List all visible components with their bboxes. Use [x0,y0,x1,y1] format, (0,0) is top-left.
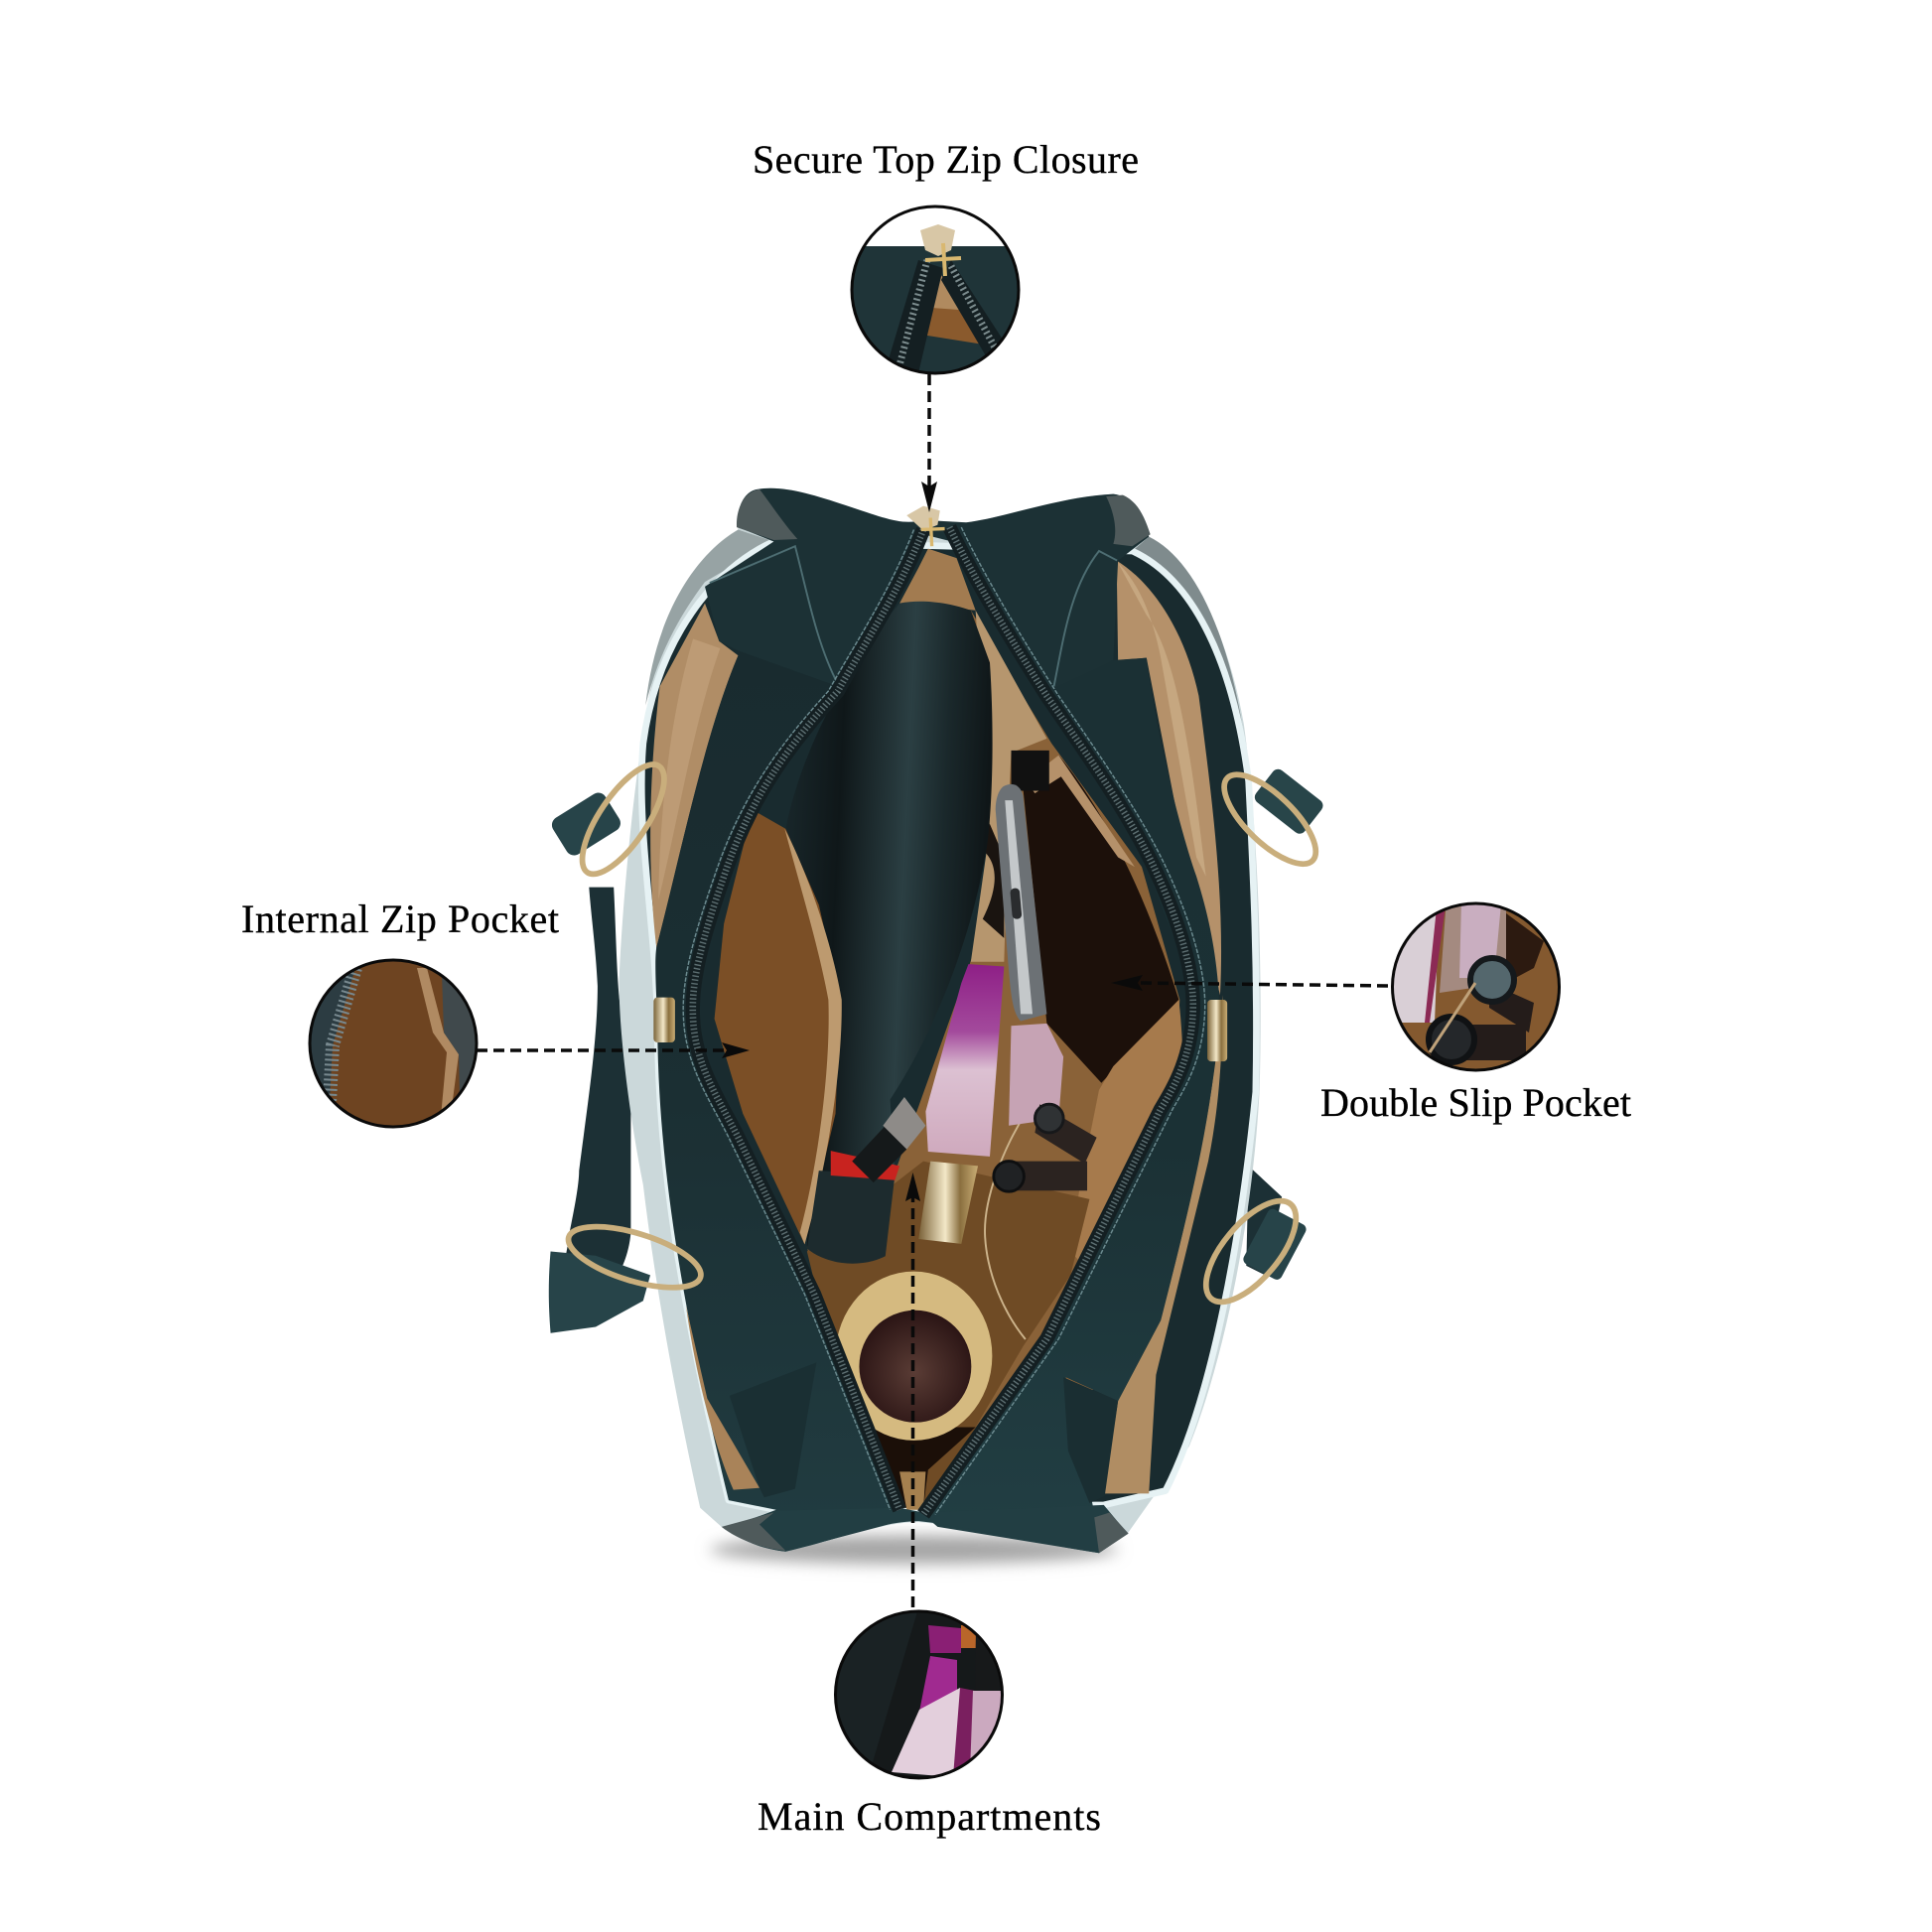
heading: secure top zip closure: Secure Top Zip Closure [753,137,1139,182]
gold ring, top right [1211,761,1329,878]
arrow: down to zip [921,374,937,512]
heading: internal zip pocket: Internal Zip Pocket [241,897,559,941]
wood ball [859,1311,971,1423]
left zip flap [655,655,899,1552]
gold lipstick tube [918,1162,978,1244]
cream compact ring [836,1272,992,1441]
lower left tan lining [686,1306,759,1490]
strap tab, top left [549,789,623,859]
tan corner patch [899,1471,925,1510]
detail circle: slip pocket [1390,898,1564,1075]
central dark leather panel [785,602,993,1256]
callout: internal zip pocket [241,897,750,1132]
lower right tan lining [1104,995,1222,1493]
bag silhouette with pale side panels [620,488,1261,1553]
smartphone [996,784,1046,1022]
detail circle: main compartments [832,1608,1006,1782]
callout: main compartments [758,1173,1101,1839]
gusset seam left [710,546,838,684]
gold ring, top left [568,753,679,886]
strap tab, top right [1252,766,1325,836]
gusset seam right [1054,551,1117,686]
top centre tan lining [899,549,976,611]
right lining highlight [1118,563,1206,877]
bag interior with white trim [641,541,1256,1510]
top rim and corner gussets [705,488,1149,691]
lipstick tube upper [1035,1104,1097,1164]
lower right corner fold [1063,1377,1118,1503]
grey upper left shoulder [645,529,773,705]
handbag photo illustration [549,488,1329,1564]
heading: double slip pocket: Double Slip Pocket [1320,1080,1631,1125]
arrow: right to pocket [477,1042,750,1058]
grey corner left [722,1513,785,1551]
callout: secure top zip closure [753,137,1139,512]
gold stud right [1207,1000,1227,1061]
dark corner patch right [1106,495,1151,546]
lipstick tube lower [994,1162,1087,1191]
callout: double slip pocket [1111,898,1631,1125]
detail circle: pocket [303,958,482,1132]
right zip flap [923,658,1219,1553]
slip pocket tan lip [1026,756,1135,867]
pale perfume bottle [1009,1024,1063,1126]
lower left corner fold [730,1362,816,1497]
pocket tan edge [784,829,842,1244]
strap tab, bottom left [549,1251,650,1333]
internal zip pocket [715,810,840,1244]
left zipper [683,529,923,1510]
upper tan fabric [971,611,1046,962]
shoulder strap [553,888,630,1299]
powder compact [836,1272,992,1441]
dark corner patch left [737,489,797,540]
black item behind phone [1012,751,1049,791]
arrow: left to slip pocket [1111,975,1388,991]
zip pull [906,506,945,546]
bottom interior fabric [807,1162,1089,1508]
gold ring, bottom right [1190,1186,1311,1316]
lower right pocket fabric [1070,1000,1183,1320]
gold ring, bottom left [562,1214,708,1300]
detail circle: zip closure [850,205,1021,375]
dark shadow and tan patch at the bottom [862,1427,976,1508]
bottom rim [727,1505,1128,1553]
stitched cord [985,1114,1026,1339]
left tan lining [650,604,738,947]
dark slip pocket with tan lip [1023,756,1178,1083]
right compartment base [807,611,1179,1517]
heading: main compartments: Main Compartments [758,1794,1101,1839]
left lining highlight [658,638,720,900]
grey upper right shoulder [1132,537,1250,786]
grey corner right [1094,1513,1129,1553]
gold stud left [653,998,675,1042]
black lipstick cap [807,1171,895,1264]
right zipper [923,527,1205,1514]
arrow: up from circle [905,1173,920,1607]
shadow fold [971,824,1004,938]
red lipstick and black strap [831,1097,925,1182]
right tan lining [1117,561,1221,995]
strap and tab, bottom right [1241,1166,1309,1282]
purple perfume bottle [925,964,1004,1157]
floor shadow [710,1536,1118,1564]
